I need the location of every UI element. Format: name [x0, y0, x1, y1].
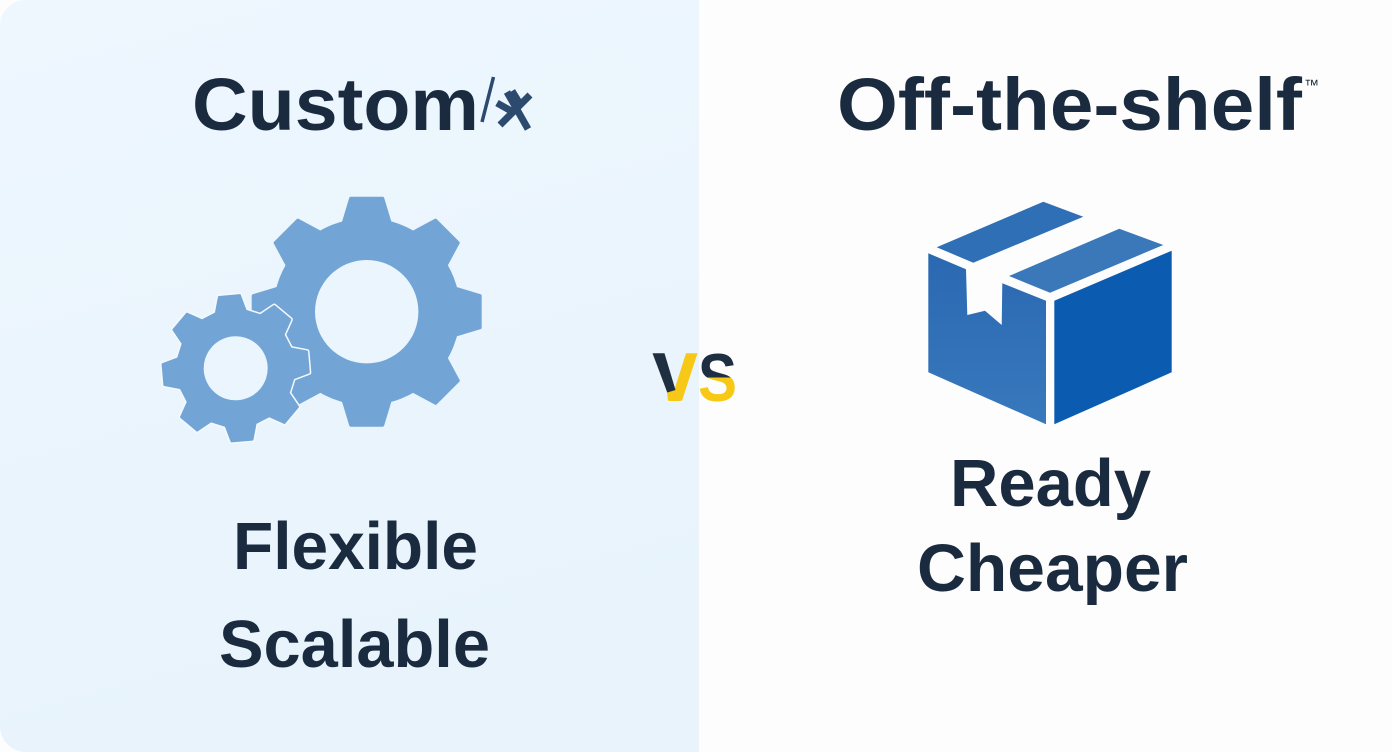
- large gear: [253, 198, 480, 425]
- heading: Off-the-shelf: ™: [1304, 77, 1319, 94]
- heading: Off-the-shelf: Off-the-shelf: [837, 63, 1302, 146]
- text: Ready: Ready: [950, 446, 1151, 521]
- text: Scalable: Scalable: [219, 607, 490, 682]
- heading: Custom: Custom: [192, 63, 479, 146]
- label: VS: V: [653, 340, 697, 416]
- label: VS: [652, 340, 737, 416]
- panel: custom background: [0, 0, 699, 752]
- panel: off-the-shelf background: [699, 0, 1392, 752]
- text: Cheaper: Cheaper: [917, 531, 1188, 606]
- icon: package box: [928, 202, 1172, 424]
- text: Flexible: Flexible: [233, 509, 478, 584]
- label: VS: S: [698, 340, 737, 416]
- icon: gears: [157, 198, 480, 447]
- small gear: [157, 290, 314, 447]
